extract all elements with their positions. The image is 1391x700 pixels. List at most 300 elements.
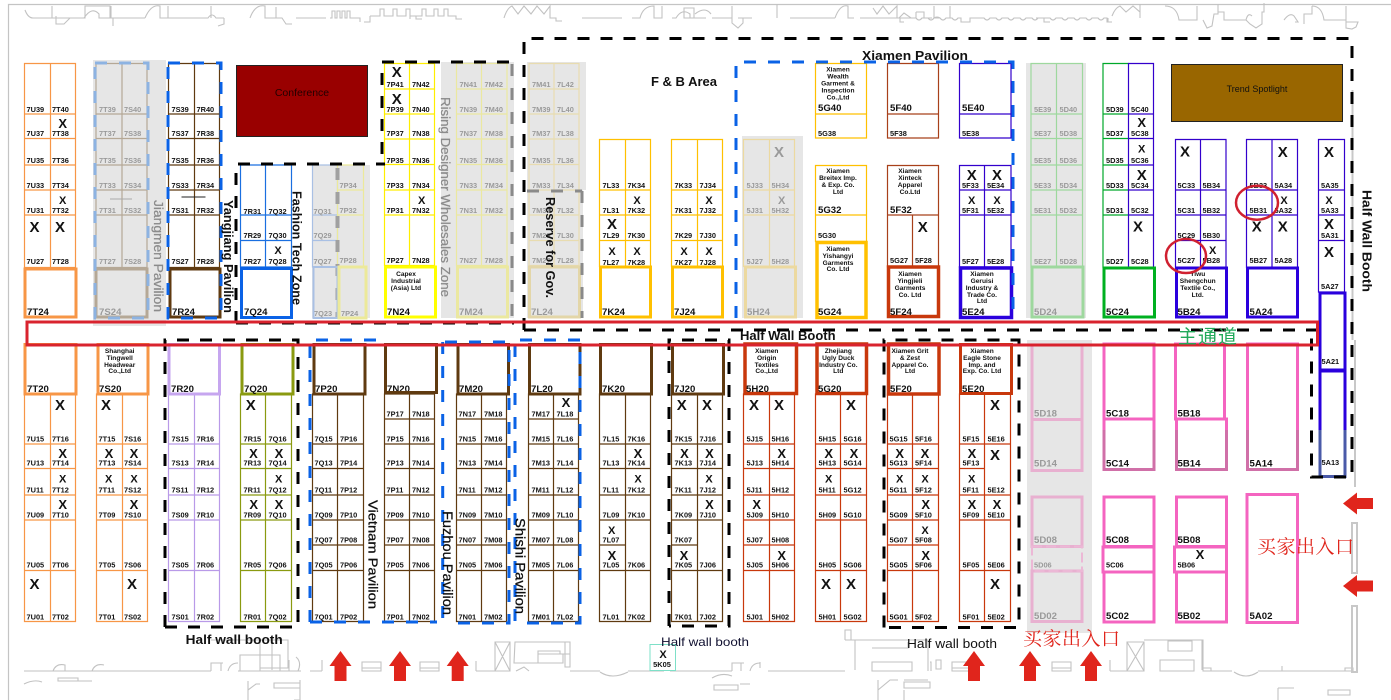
booths: 7R 7Q upper: 7Q28 <box>268 257 287 266</box>
booths: 7T 7S lower: 7T01 <box>98 613 115 622</box>
booths: 7M 7L lower: 7L06 <box>556 561 573 570</box>
company names upper: & Exp. Co. <box>822 182 855 189</box>
booths: 7T 7S upper, reserved: 7S34 <box>124 181 142 190</box>
dashed zone outlines <box>95 38 1352 628</box>
booths: 5B 5A upper <box>1246 140 1298 268</box>
booths: 7Q 7P upper, reserved: 7P28 <box>340 256 357 265</box>
booths: 5E upper: 5E28 <box>987 257 1004 266</box>
booths: 7T 7S lower: 7T15 <box>98 435 115 444</box>
booths: 5F upper: 5G27 <box>890 256 908 265</box>
booths: 7M 7L lower: 7L10 <box>556 511 573 520</box>
sold booth X marks: X <box>990 447 1000 464</box>
booths: 5E upper: 5E32 <box>987 206 1004 215</box>
sold booth X marks: X <box>1137 115 1146 130</box>
booths: 7N 7M upper, reserved: 7M40 <box>484 105 503 114</box>
booths: 7M 7L upper, reserved: 7L32 <box>557 206 574 215</box>
sold booth X marks: X <box>680 246 688 258</box>
company names lower: Exp. Co. Ltd <box>963 368 1001 375</box>
sold booth X marks: X <box>677 397 687 414</box>
sold booth X marks: X <box>921 446 930 461</box>
booths: 7M 7L lower: 7L02 <box>556 613 573 622</box>
booths: 7K 7J upper: 7J28 <box>700 258 716 267</box>
booths: 7T 7S lower: 7S12 <box>124 486 141 495</box>
booths: 5B 5A upper: 5A34 <box>1274 181 1293 190</box>
sold booth X marks: X <box>608 246 616 258</box>
booths: 5F 5E lower: 5E02 <box>988 613 1005 622</box>
pink booths column 5A: 5A02 <box>1250 611 1272 622</box>
entrance arrows <box>330 492 1373 681</box>
booths: 7Q 7P lower: 7P02 <box>340 613 357 622</box>
booths: 7T 7S lower: 7T05 <box>98 561 115 570</box>
booths: 7U 7T upper: 7T32 <box>52 206 69 215</box>
booths: 5J 5H lower: 5H06 <box>772 561 789 570</box>
booths: 5J 5H upper, reserved <box>744 140 794 266</box>
booths: 7P 7N lower <box>384 394 434 622</box>
sold booth X marks: X <box>246 397 256 414</box>
booths: 7U 7T lower: 7T12 <box>52 486 69 495</box>
booths: 7M 7L upper, reserved: 7M29 <box>532 231 550 240</box>
booths: 7K 7J upper: 7J30 <box>700 231 716 240</box>
booths: 7Q 7P upper, reserved: 7P34 <box>340 181 358 190</box>
company names upper: Apparel <box>898 182 922 189</box>
booths: 5H 5G lower: 5H09 <box>818 511 836 520</box>
booths: 5G upper <box>816 64 866 242</box>
sold booth X marks: X <box>130 497 139 512</box>
booths: 7S 7R upper: 7S39 <box>172 105 189 114</box>
booths: 7L 7K upper: 7K30 <box>628 231 645 240</box>
booths: 5D 5C upper: 5C32 <box>1131 206 1149 215</box>
booths: 7L 7K lower: 7L15 <box>602 435 619 444</box>
booths: 5G 5F lower: 5G15 <box>890 435 908 444</box>
booths: 5G 5F lower: 5F02 <box>915 613 932 622</box>
booths: 5J 5H upper, reserved: 5J27 <box>746 257 763 266</box>
company names lower: Eagle Stone <box>963 355 1001 362</box>
booths: 5D 5C upper: 5C40 <box>1131 105 1149 114</box>
booths: 7S 7R lower: 7R10 <box>196 511 214 520</box>
sold booth X marks: X <box>705 497 714 512</box>
sold booth X marks: X <box>895 446 904 461</box>
large booths upper row: 5C24 <box>1106 307 1130 318</box>
company names lower: Xiamen <box>755 348 778 355</box>
booths: 7N 7M lower: 7N09 <box>458 511 476 520</box>
booths: 7P 7N upper: 7N40 <box>412 105 430 114</box>
company names upper: Yishangyi <box>823 253 854 260</box>
company names upper: Xiamen <box>898 271 922 278</box>
booths: 7R 7Q upper <box>240 165 292 267</box>
company names upper: Co.Ltd <box>900 189 920 196</box>
booths: 5C 5B upper: 5C33 <box>1178 181 1195 190</box>
booths: 7M 7L upper, reserved: 7M33 <box>532 181 550 190</box>
booths: 7Q 7P lower: 7Q13 <box>314 459 333 468</box>
company names upper: Shengchun <box>1180 278 1216 285</box>
sold booth X marks: X <box>29 219 40 236</box>
company names upper: Industrial <box>391 278 421 285</box>
booths: 7S 7R lower: 7R02 <box>196 613 214 622</box>
company names lower: Co.,Ltd <box>755 368 778 375</box>
sold booth X marks: X <box>993 497 1002 512</box>
sold booth X marks: X <box>921 548 930 563</box>
booths: 5G upper: 5G32 <box>818 205 841 216</box>
booths: 7N 7M lower: 7M10 <box>484 511 502 520</box>
booths: 7S 7R upper: 7S27 <box>172 257 189 266</box>
company names upper: Geruisi <box>971 278 994 285</box>
booths: 7M 7L upper, reserved <box>529 64 579 266</box>
booths: 5E 5D upper, reserved: 5D40 <box>1060 105 1077 114</box>
company names upper: (Asia) Ltd <box>391 285 421 292</box>
booths: 5G 5F lower: 5F06 <box>915 561 932 570</box>
sold booth X marks: X <box>55 397 65 414</box>
booths: 7P 7N upper: 7N34 <box>412 181 431 190</box>
booths: 5H 5G lower <box>816 394 866 622</box>
booths: 7N 7M upper, reserved: 7N37 <box>460 129 477 138</box>
sold booth X marks: X <box>608 548 617 563</box>
sold booth X marks: X <box>752 497 761 512</box>
booths: 7K 7J lower: 7K09 <box>674 511 692 520</box>
booths: 7Q 7P lower: 7Q05 <box>314 561 333 570</box>
company names upper <box>391 67 1216 305</box>
booths: 5J 5H lower: 5J09 <box>746 511 763 520</box>
booths: 5B 5A upper: 5A32 <box>1274 206 1292 215</box>
booths: 7R 7Q lower: 7Q10 <box>268 511 287 520</box>
booths: 7N 7M upper, reserved: 7N39 <box>460 105 477 114</box>
room: conference <box>236 66 368 136</box>
booths: 5C 5B upper: 5C27 <box>1178 256 1195 265</box>
pink booths column 5D, reserved: 5D08 <box>1034 535 1058 546</box>
booths: 5G upper: 5G30 <box>818 231 836 240</box>
booths: 5D 5C upper: 5C28 <box>1131 257 1149 266</box>
sold booth X marks: X <box>702 397 712 414</box>
booths: 5B 5A upper: 5A28 <box>1274 256 1292 265</box>
main aisle red outline <box>27 322 1318 345</box>
booths: 7U 7T upper: 7U37 <box>26 129 44 138</box>
large booths upper row: 7T24 <box>27 307 50 318</box>
booths: 5F 5E lower: 5F13 <box>962 459 979 468</box>
booths: 7L 7K lower: 7K14 <box>628 459 646 468</box>
pink booths column 5B: 5B18 <box>1178 409 1201 420</box>
room: conference: Conference <box>275 87 329 99</box>
booths: 7U 7T lower <box>24 394 76 622</box>
booths: 7S 7R lower: 7S13 <box>172 459 189 468</box>
headings: 主通道 <box>1178 322 1237 349</box>
sold booth X marks: X <box>392 64 402 81</box>
booths: 7R 7Q lower: 7R13 <box>244 459 261 468</box>
booths: 5A column <box>1318 140 1345 476</box>
sold booth X marks: X <box>918 219 928 236</box>
booths: 7U 7T lower: 7T06 <box>52 561 69 570</box>
booths: 5G 5F lower: 5F14 <box>915 459 933 468</box>
booths: 7U 7T lower: 7T16 <box>52 435 69 444</box>
booths: 7N 7M upper, reserved: 7M32 <box>484 206 503 215</box>
booths: 7M 7L lower: 7L08 <box>556 536 573 545</box>
sold booth X marks: X <box>778 195 786 207</box>
booths: 7L 7K upper: 7K32 <box>628 206 645 215</box>
vertical pavilion labels: Shishi Pavilion <box>512 518 528 614</box>
booths: 5E 5D upper, reserved: 5E35 <box>1034 156 1051 165</box>
booths: 5A column: 5A31 <box>1321 231 1339 240</box>
booths: 5F 5E lower: 5F11 <box>962 486 979 495</box>
half wall booth captions: Half wall booth <box>186 633 283 647</box>
sold booth X marks: X <box>633 246 641 258</box>
booths: 5J 5H lower: 5H10 <box>772 511 789 520</box>
booths: 7N 7M upper, reserved: 7N31 <box>460 206 477 215</box>
booths: 7L 7K lower: 7L05 <box>602 561 619 570</box>
booths: 7Q 7P lower: 7Q15 <box>314 435 333 444</box>
booths: 7M 7L upper, reserved: 7L34 <box>557 181 575 190</box>
booths: 7N 7M upper, reserved: 7M38 <box>484 129 503 138</box>
booths: 7M 7L upper, reserved: 7L38 <box>557 129 574 138</box>
booths: 7P 7N upper: 7N38 <box>412 129 430 138</box>
sold booth X marks: X <box>825 474 833 486</box>
booths: 7R 7Q upper: 7R27 <box>244 257 261 266</box>
sold booth X marks: X <box>990 397 1000 414</box>
company names upper: Xiamen <box>970 271 994 278</box>
sold booth X marks: X <box>968 446 977 461</box>
sold booth X marks: X <box>749 397 759 414</box>
large booths upper row: 5D24 <box>1034 307 1058 318</box>
booths: 5F upper: 5F32 <box>890 205 912 216</box>
pink booths column 5B: 5B08 <box>1178 535 1201 546</box>
company names upper: Xiamen <box>826 67 850 74</box>
booths: 7M 7L upper, reserved: 7M39 <box>532 105 550 114</box>
booths: 7U 7T upper: 7U33 <box>26 181 44 190</box>
sold booth X marks: X <box>1280 195 1288 207</box>
sold booth X marks: X <box>774 397 784 414</box>
booths: 7S 7R upper: 7R38 <box>196 129 214 138</box>
sold booth X marks: X <box>130 474 138 486</box>
booths: 7N 7M lower: 7N07 <box>458 536 476 545</box>
booths: 7M 7L lower: 7M07 <box>532 536 550 545</box>
sold booth X marks: X <box>821 576 831 593</box>
booths: 7M 7L upper, reserved: 7M37 <box>532 129 550 138</box>
sold booth X marks: X <box>275 446 284 461</box>
large booths lower row: 7M20 <box>459 384 483 395</box>
booths: 7P 7N upper: 7P31 <box>386 206 404 215</box>
booths: 7T 7S lower: 7S02 <box>124 613 141 622</box>
vertical pavilion labels: Vietnam Pavilion <box>366 500 380 609</box>
sold booth X marks: X <box>680 446 689 461</box>
large booths lower row: 7T20 <box>27 384 49 395</box>
booths: 5C 5B upper <box>1176 140 1226 268</box>
booths: 7S 7R lower: 7R14 <box>196 459 215 468</box>
booths: 7L 7K upper: 7K28 <box>628 258 645 267</box>
large booths lower row: 5G20 <box>818 384 841 395</box>
booths: 7M 7L lower: 7M11 <box>532 486 550 495</box>
booths: 7P 7N upper: 7P37 <box>386 129 404 138</box>
sold booth X marks: X <box>680 548 689 563</box>
booths: 5G 5F lower: 5G13 <box>890 459 908 468</box>
pink booths column 5B: 5B02 <box>1178 611 1200 622</box>
booths: 5E 5D upper, reserved: 5D34 <box>1060 181 1078 190</box>
booths: 5E upper: 5F33 <box>962 181 979 190</box>
sold booth X marks: X <box>967 167 977 184</box>
booths: 7P 7N upper: 7N32 <box>412 206 430 215</box>
booths: 5F 5E lower: 5E06 <box>988 561 1005 570</box>
sold booth X marks: X <box>1252 219 1262 236</box>
sold booth X marks: X <box>608 525 616 537</box>
booths: 5J 5H lower: 5J11 <box>746 486 763 495</box>
large booths upper row: 5B24 <box>1178 307 1201 318</box>
company names lower: Imp. and <box>968 362 996 369</box>
pink booths column 5C: 5C08 <box>1106 535 1130 546</box>
sold booth X marks: X <box>1196 547 1205 562</box>
booths: 7T 7S upper, reserved: 7S38 <box>124 129 141 138</box>
large booths lower row: 7P20 <box>315 384 337 395</box>
sold booth X marks: X <box>1325 195 1333 207</box>
sold booth X marks: X <box>59 474 67 486</box>
sold booth X marks: X <box>59 195 67 207</box>
booths: 7K 7J upper <box>672 140 722 267</box>
booths: 7Q 7P upper, reserved: 7Q27 <box>314 257 332 266</box>
pink booths column 5A <box>1247 344 1298 622</box>
booths: 5J 5H lower: 5J01 <box>746 613 763 622</box>
booths: 5J 5H lower <box>744 394 794 622</box>
sold booth X marks: X <box>274 245 282 257</box>
sold booth X marks: X <box>1324 244 1334 261</box>
booths: 7R 7Q lower: 7R05 <box>244 561 261 570</box>
sold booth X marks: X <box>58 446 67 461</box>
booths: 7S 7R lower: 7S11 <box>172 486 188 495</box>
company names upper: Breitex Imp. <box>819 175 857 182</box>
booths: 7Q 7P lower: 7P08 <box>340 536 357 545</box>
large booths upper row: 5A24 <box>1250 307 1273 318</box>
booths: 7U 7T upper: 7U27 <box>26 257 44 266</box>
booths: 5G upper: 5G40 <box>818 103 841 114</box>
booths: 7P 7N lower: 7N16 <box>412 435 430 444</box>
booths: 7T 7S upper, reserved <box>96 64 147 268</box>
booths: 7L 7K lower: 7L01 <box>602 613 619 622</box>
booths: 7K 7J lower: 7J14 <box>700 459 717 468</box>
booths: 5G 5F lower: 5F10 <box>915 511 932 520</box>
booths: 5C 5B upper: 5B28 <box>1202 256 1220 265</box>
vertical pavilion labels: Rising Designer Wholesales Zone <box>438 97 453 297</box>
sold booth X marks: X <box>58 116 67 131</box>
booths: 5J 5H upper, reserved: 5J31 <box>746 206 763 215</box>
booths: 7U 7T lower: 7U05 <box>26 561 44 570</box>
booths: 7R 7Q lower: 7R01 <box>244 613 261 622</box>
booths: 5G 5F lower: 5F16 <box>915 435 932 444</box>
booths: 7N 7M lower: 7M08 <box>484 536 502 545</box>
booths: 5J 5H lower: 5J07 <box>746 536 763 545</box>
half wall booth captions: Half wall booth <box>661 635 749 649</box>
booths: 7U 7T upper: 7U39 <box>26 105 44 114</box>
large booths upper row: 7N24 <box>387 307 411 318</box>
booths: 7P 7N lower: 7P15 <box>386 435 404 444</box>
booths: 7L 7K lower: 7K12 <box>628 486 645 495</box>
pink booths column 5D, reserved: 5D02 <box>1034 611 1057 622</box>
booths: 7N 7M lower: 7N13 <box>458 459 476 468</box>
booths: 7M 7L upper, reserved: 7M41 <box>532 80 550 89</box>
sold booth X marks: X <box>634 446 643 461</box>
buyer entrance labels: 买家出入口 <box>1023 628 1120 650</box>
booths: 5A column: 5A21 <box>1322 357 1339 366</box>
pink booths column 5C: 5C18 <box>1106 409 1130 420</box>
company names upper: Yiwu <box>1190 271 1205 278</box>
booths: 5J 5H lower: 5H14 <box>772 459 790 468</box>
sold booth X marks: X <box>705 446 714 461</box>
booths: 5D 5C upper: 5D39 <box>1106 105 1124 114</box>
booths: 7P 7N lower: 7P01 <box>386 613 404 622</box>
booths: 7U 7T upper: 7T34 <box>52 181 70 190</box>
booths: 7T 7S upper, reserved: 7T31 <box>99 206 116 215</box>
booths: 5E 5D upper, reserved: 5D36 <box>1060 156 1077 165</box>
company names upper: Co. Ltd <box>827 266 849 273</box>
booths: 5F 5E lower: 5E12 <box>988 486 1005 495</box>
company names lower: Ltd <box>833 368 843 375</box>
booths: 7T 7S lower: 7S10 <box>124 511 141 520</box>
booths: 7L 7K lower: 7L11 <box>602 486 619 495</box>
booths: 7U 7T upper: 7T36 <box>52 156 69 165</box>
booths: 7T 7S lower: 7S06 <box>124 561 141 570</box>
booths: 7S 7R upper: 7R36 <box>196 156 214 165</box>
sold booth X marks: X <box>1138 144 1146 156</box>
company names lower: Headwear <box>104 362 136 369</box>
booths: 7N 7M upper, reserved: 7M36 <box>484 156 503 165</box>
booths: 7S 7R lower: 7S05 <box>172 561 189 570</box>
booths: 7T 7S lower <box>96 394 148 622</box>
booths: 7T 7S upper, reserved: 7T33 <box>99 181 116 190</box>
booths: 7P 7N upper: 7N28 <box>412 256 430 265</box>
grey reserved backgrounds <box>93 60 1092 633</box>
large booths lower row: 5F20 <box>890 384 912 395</box>
booths: 5H 5G lower: 5H01 <box>818 613 836 622</box>
booths: 7L 7K upper: 7L31 <box>602 206 619 215</box>
headings <box>651 48 1237 349</box>
booths: 7T 7S upper, reserved: 7S32 <box>124 206 141 215</box>
booths: 7M 7L lower: 7L14 <box>556 459 574 468</box>
booths: 5F upper: 5F38 <box>890 129 907 138</box>
company names upper: Capex <box>396 271 416 278</box>
sold booth X marks: X <box>705 474 713 486</box>
booths: 5A column: 5A13 <box>1322 458 1339 467</box>
booths: 7M 7L upper, reserved: 7L28 <box>557 256 574 265</box>
booth 5K05: 5K05 <box>653 660 671 669</box>
sold booth X marks: X <box>777 446 786 461</box>
booths: 5D 5C upper: 5C36 <box>1131 156 1149 165</box>
large booths upper row: 5F24 <box>890 307 913 318</box>
booths: 7U 7T lower: 7U01 <box>26 613 44 622</box>
booths: 5F 5E lower: 5F09 <box>962 511 979 520</box>
sold booth X marks: X <box>777 548 786 563</box>
booths: 7T 7S upper, reserved: 7S28 <box>124 257 141 266</box>
vertical pavilion labels: Yangjiang Pavilion <box>221 200 236 313</box>
booths: 7N 7M lower: 7N17 <box>458 410 476 419</box>
large booths upper row: 7Q23 <box>314 309 332 318</box>
booths: 5G 5F lower <box>888 394 938 622</box>
booths: 5A column: 5A33 <box>1321 206 1339 215</box>
headings: Half Wall Booth <box>740 328 836 343</box>
sold booth X marks: X <box>992 167 1002 184</box>
booths: 7Q 7P upper, reserved: 7Q29 <box>314 231 332 240</box>
booths: 7P 7N lower: 7N12 <box>412 486 430 495</box>
booths: 5G 5F lower: 5G11 <box>890 486 907 495</box>
booths: 7U 7T lower: 7U11 <box>26 486 44 495</box>
booths: 5C 5B upper: 5B30 <box>1202 231 1220 240</box>
sold booth X marks: X <box>275 474 283 486</box>
booths: 5F upper: 5F28 <box>915 256 932 265</box>
booths: 7M 7L lower: 7L12 <box>556 486 573 495</box>
booths: 7R 7Q lower: 7Q16 <box>268 435 287 444</box>
booths: 7N 7M upper, reserved: 7N41 <box>460 80 477 89</box>
large booths upper row: 5H24 <box>747 307 771 318</box>
booths: 7Q 7P lower: 7Q01 <box>314 613 333 622</box>
booths: 7N 7M upper, reserved: 7N27 <box>460 256 477 265</box>
booths: 7L 7K lower: 7L09 <box>602 511 619 520</box>
booths: 7N 7M lower: 7M12 <box>484 486 502 495</box>
large booths upper row: 7Q24 <box>244 307 268 318</box>
booths: 7S 7R upper: 7R32 <box>196 206 214 215</box>
booths: 7L 7K lower: 7L07 <box>602 536 619 545</box>
booths: 5J 5H upper, reserved: 5H28 <box>772 257 789 266</box>
